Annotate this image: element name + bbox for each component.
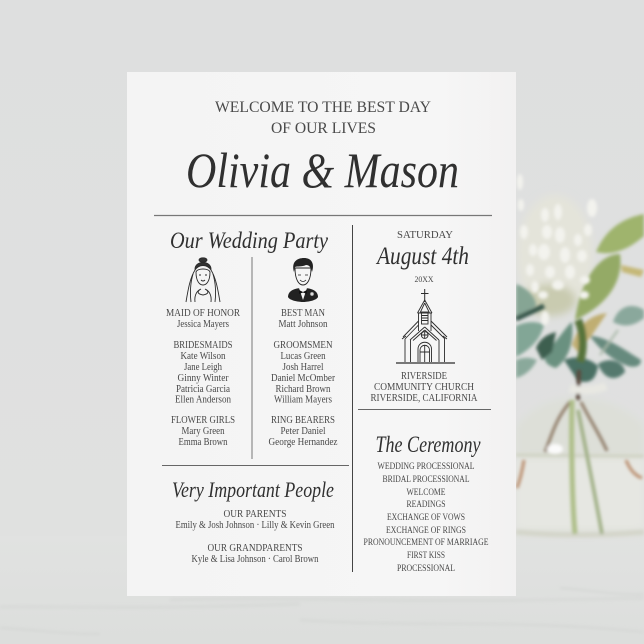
column: groom side: Matt Johnson [278,319,328,330]
panel: date and venue [370,230,478,404]
text: year: 20XX [414,275,434,284]
list: ceremony order: FIRST KISS [407,550,445,560]
text: venue: COMMUNITY CHURCH [374,382,474,393]
column: bride side: Patricia Garcia [176,384,231,395]
column: groom side: George Hernandez [268,437,338,448]
column: groom side: Lucas Green [280,351,326,362]
list: ceremony order: PRONOUNCEMENT OF MARRIAGE [364,537,489,547]
icon: church [396,289,455,363]
welcome heading: WELCOME TO THE BEST DAY [215,99,431,116]
text: grandparents [192,543,318,565]
text: saturday: SATURDAY [397,230,453,241]
heading: very important people: Very Important People [172,477,334,502]
glass vase [516,370,644,536]
column: bride side: Emma Brown [178,437,228,448]
icon: bride [186,258,220,302]
couple names: Olivia & Mason [186,142,459,198]
column: bride side: BRIDESMAIDS [174,340,232,351]
list: ceremony order [364,461,489,573]
text: grandparents: OUR GRANDPARENTS [208,543,302,554]
welcome heading [215,99,431,137]
text: parents: OUR PARENTS [224,509,286,520]
flowers and foliage [516,174,644,382]
icon: groom [288,258,318,302]
divider lines [154,216,492,572]
column: groom side: William Mayers [274,394,332,406]
list: ceremony order: EXCHANGE OF VOWS [387,512,465,522]
column: groom side: GROOMSMEN [274,340,332,351]
list: ceremony order: EXCHANGE OF RINGS [386,525,466,535]
column: bride side [166,308,240,448]
column: bride side: Ellen Anderson [175,394,231,406]
text: venue: RIVERSIDE, CALIFORNIA [370,393,478,404]
column: bride side: Jessica Mayers [177,319,229,330]
panel: the ceremony [364,432,489,573]
text: parents [176,509,334,531]
welcome heading: OF OUR LIVES [271,120,376,137]
text: grandparents: Kyle & Lisa Johnson · Carol Brown [192,554,318,565]
list: ceremony order: WELCOME [406,487,446,497]
background: marble table [0,536,644,644]
column: bride side: Jane Leigh [184,362,222,373]
list: ceremony order: READINGS [406,499,446,509]
panel: wedding party [166,228,338,448]
column: groom side: Richard Brown [276,384,330,395]
column: groom side: BEST MAN [281,308,325,319]
column: bride side: Kate Wilson [180,351,226,362]
text: parents: Emily & Josh Johnson · Lilly & Kevin Green [176,520,334,531]
heading: the ceremony: The Ceremony [376,432,481,457]
column: bride side: MAID OF HONOR [166,308,240,319]
list: ceremony order: WEDDING PROCESSIONAL [378,461,474,471]
panel: very important people [172,477,334,565]
text: venue [370,371,478,404]
white blossoms [517,174,597,325]
column: groom side: Peter Daniel [280,426,326,437]
column: groom side: RING BEARERS [271,415,335,426]
paper card [127,72,516,596]
list: ceremony order: BRIDAL PROCESSIONAL [382,474,470,484]
list: ceremony order: PROCESSIONAL [397,563,455,573]
column: groom side [268,308,338,448]
column: bride side: Ginny Winter [178,373,229,384]
column: groom side: Daniel McOmber [271,373,336,384]
green leaves [516,214,644,382]
text: venue: RIVERSIDE [401,371,447,382]
column: groom side: Josh Harrel [282,362,324,373]
column: bride side: Mary Green [182,426,224,437]
heading: our wedding party: Our Wedding Party [170,228,329,253]
column: bride side: FLOWER GIRLS [171,415,235,426]
date: august 4th: August 4th [375,243,469,270]
